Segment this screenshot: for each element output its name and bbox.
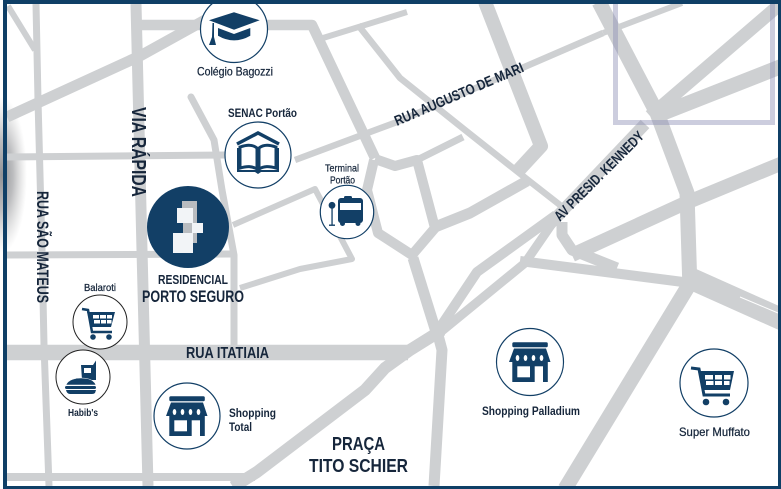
road: big road from the top xyxy=(485,2,541,172)
place label: Praça Tito Schier: TITO SCHIER xyxy=(309,455,408,476)
point: Shopping Total xyxy=(154,383,276,449)
point: Shopping Total: Total xyxy=(229,420,252,434)
road: diagonal to Praça Tito Schier xyxy=(233,330,442,487)
logo: Residencial Porto Seguro xyxy=(147,186,229,268)
point: Colégio Bagozzi xyxy=(197,0,273,78)
road: mid horizontals xyxy=(7,155,225,157)
icon: burger and drink xyxy=(56,350,110,404)
road: Av. Presid. Kennedy xyxy=(550,124,645,224)
point: Colégio Bagozzi: Colégio Bagozzi xyxy=(197,64,273,78)
street label: Rua São Mateus: RUA SÃO MATEUS xyxy=(33,191,53,303)
point: Habib's: Habib's xyxy=(68,408,98,419)
heading: Residencial Porto Seguro: RESIDENCIAL xyxy=(158,272,228,287)
road: avenue carriageways xyxy=(437,215,556,332)
road: winding street right of the logo xyxy=(233,189,352,288)
point: Terminal Portão: Portão xyxy=(330,174,355,186)
point: Super Muffato: Super Muffato xyxy=(679,425,750,439)
road: top-left diagonal xyxy=(8,6,35,50)
icon: graduation cap xyxy=(200,0,268,62)
point: Super Muffato xyxy=(679,349,750,439)
point: Terminal Portão xyxy=(320,162,374,239)
icon: open book under a roof xyxy=(225,122,291,188)
point: Shopping Total: Shopping xyxy=(229,406,276,420)
point: Balaroti xyxy=(73,283,127,349)
road: Rua Augusto de Mari xyxy=(295,33,603,160)
road: Via Rápida xyxy=(136,4,148,486)
icon: storefront xyxy=(154,383,220,449)
icon: shopping cart xyxy=(680,349,748,417)
point: Habib's xyxy=(56,350,110,419)
road: Rua São Mateus xyxy=(36,4,49,486)
point: Balaroti: Balaroti xyxy=(84,283,116,294)
road: ring around the terminal xyxy=(367,159,435,255)
point: Shopping Palladium xyxy=(482,328,580,418)
road: Rua Itatiaia xyxy=(7,345,408,360)
street label: Via Rápida: VIA RÁPIDA xyxy=(127,107,150,197)
road: bottom horizontal xyxy=(7,473,255,481)
icon: bus and stop xyxy=(320,185,374,239)
left edge shadow xyxy=(0,97,27,253)
heading: Residencial Porto Seguro xyxy=(142,272,244,306)
heading: Residencial Porto Seguro: PORTO SEGURO xyxy=(142,287,244,306)
road: SENAC street xyxy=(191,97,234,350)
road: top horizontal and descent xyxy=(140,25,375,158)
road: main right diagonal xyxy=(599,2,690,290)
street label: Av. Presid. Kennedy: AV PRESID. KENNEDY xyxy=(552,128,648,225)
point: SENAC Portão xyxy=(225,106,297,188)
icon: storefront xyxy=(496,328,564,396)
road median line xyxy=(740,297,778,313)
point: Terminal Portão: Terminal xyxy=(325,162,359,174)
inset square outline xyxy=(613,4,775,125)
place label: Praça Tito Schier: PRAÇA xyxy=(332,433,385,454)
road: long diagonal xyxy=(7,20,205,117)
point: SENAC Portão: SENAC Portão xyxy=(228,106,297,120)
street label: Rua Itatiaia: RUA ITATIAIA xyxy=(186,345,269,362)
place label: Praça Tito Schier xyxy=(309,433,408,476)
icon: shopping cart xyxy=(73,295,127,349)
street label: Rua Augusto de Mari: RUA AUGUSTO DE MARI xyxy=(392,60,526,130)
point: Shopping Palladium: Shopping Palladium xyxy=(482,404,580,418)
